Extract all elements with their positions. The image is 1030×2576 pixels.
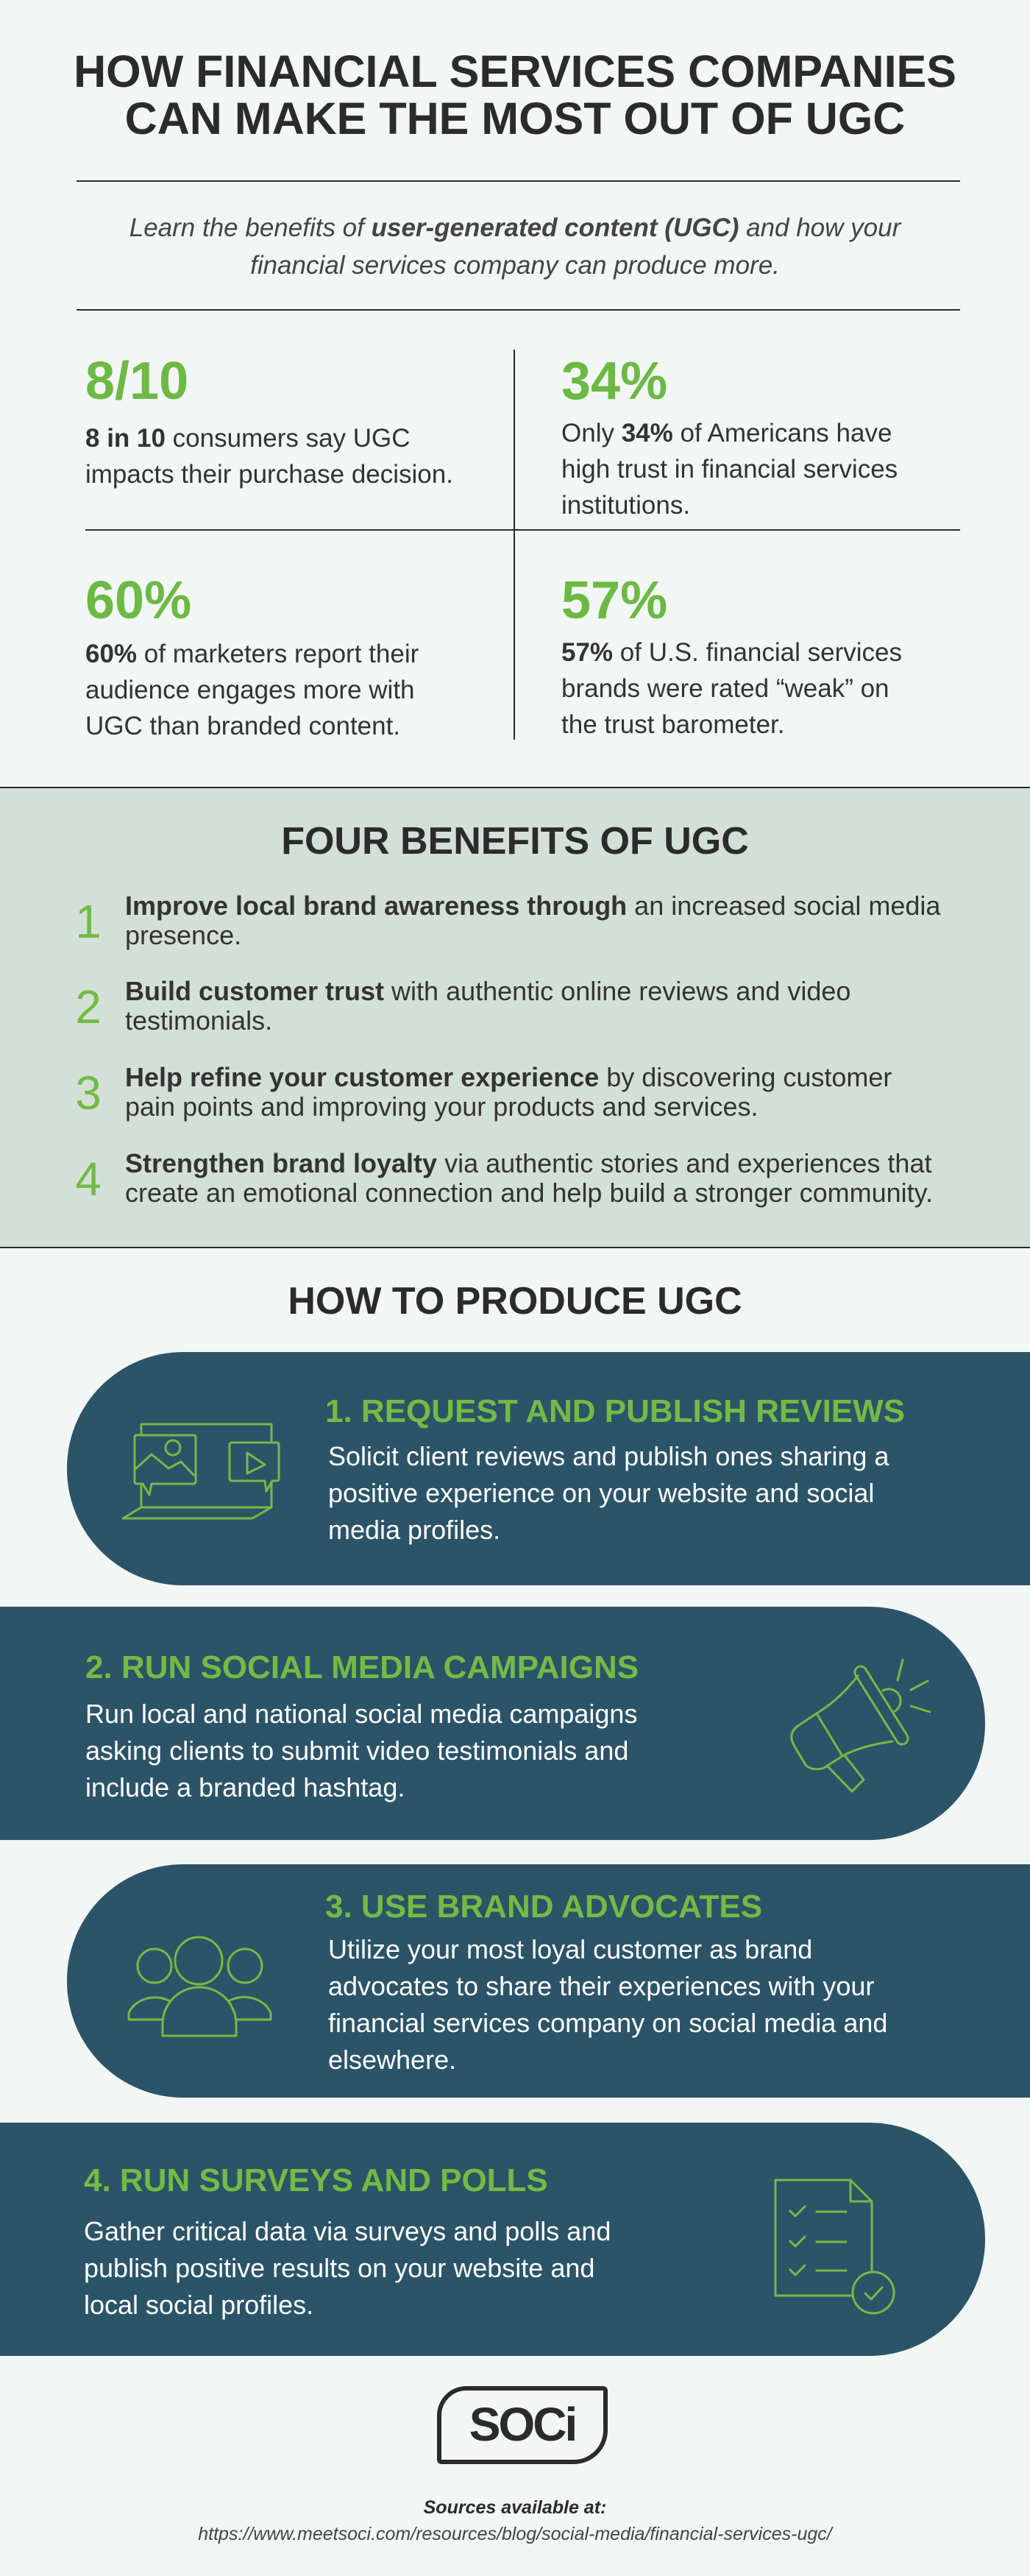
benefit 2 [75,976,850,1036]
text: campaigns: include a branded hashtag. [85,1772,405,1802]
benefit 4: Strengthen brand loyalty via authentic stories and experiences that [125,1148,931,1178]
benefit 1: Improve local brand awareness through an increased social media [125,891,940,921]
benefit 4 [75,1148,933,1208]
icon: checklist document [774,2179,895,2314]
benefit 3: pain points and improving your products and services. [125,1091,758,1122]
benefit 4: 4 [75,1153,102,1206]
heading: social media campaigns: 2. RUN SOCIAL MEDIA CAMPAIGNS [85,1649,639,1685]
subtitle [129,213,902,280]
title: HOW FINANCIAL SERVICES COMPANIES [74,46,956,96]
stat: 57%: the trust barometer. [561,710,784,739]
logo: SOCi: SOCi [469,2398,575,2451]
stat: 34%: high trust in financial services [561,455,898,484]
card 1: reviews [67,1352,1030,1585]
stat: 60%: audience engages more with [85,676,415,704]
logo: SOCi [437,2386,608,2464]
benefit 3: 3 [75,1066,102,1119]
stat: 57%: brands were rated “weak” on [561,674,889,703]
text: advocates [328,1934,887,2075]
stat: 8/10: impacts their purchase decision. [85,460,453,489]
text: advocates: elsewhere. [328,2045,456,2075]
card 4: surveys [0,2123,985,2356]
benefit 2: Build customer trust with authentic online reviews and video [125,976,850,1006]
benefit 3 [75,1062,892,1122]
benefit 1: 1 [75,895,102,948]
card 3: brand advocates [67,1864,1030,2098]
text: advocates: Utilize your most loyal customer as brand [328,1934,812,1964]
text: surveys: Gather critical data via surveys and polls and [84,2216,611,2246]
sources: Sources available at: [424,2497,606,2518]
benefit 1: presence. [125,920,241,950]
heading: use brand advocates: 3. USE BRAND ADVOCATES [325,1889,762,1925]
benefit 1 [75,891,940,950]
stat: 34% [561,352,898,520]
title: CAN MAKE THE MOST OUT OF UGC [125,93,905,144]
text: advocates: financial services company on social media and [328,2008,887,2038]
stat: 60% [85,571,419,740]
stat: 60%: 60% [85,571,191,630]
sources: https://www.meetsoci.com/resources/blog/social-media/financial-services-ugc/ [198,2524,832,2544]
subtitle: Learn the benefits of user-generated content (UGC) and how your [129,213,901,242]
text: surveys [84,2216,611,2320]
text: campaigns: Run local and national social media campaigns [85,1699,637,1729]
sources [198,2497,834,2544]
stat: 60%: 60% of marketers report their [85,640,419,668]
text: reviews [328,1441,889,1545]
stat: 8/10: 8/10 [85,352,188,411]
stat: 8/10: 8 in 10 consumers say UGC [85,424,411,453]
text: surveys: publish positive results on your website and [84,2253,594,2283]
benefit 3: Help refine your customer experience by discovering customer [125,1062,892,1092]
title [74,46,956,144]
text: surveys: local social profiles. [84,2290,313,2320]
panel: four benefits [0,787,1030,1248]
stat: 34%: 34% [561,352,667,411]
benefit 2: testimonials. [125,1005,272,1036]
icon: megaphone [790,1659,931,1793]
heading: four benefits: FOUR BENEFITS OF UGC [281,820,749,863]
text: campaigns: asking clients to submit video testimonials and [85,1735,628,1766]
stat: 8/10 [85,352,453,489]
text: reviews: positive experience on your website and social [328,1478,874,1508]
benefit 2: 2 [75,980,102,1033]
heading: surveys and polls: 4. RUN SURVEYS AND POLLS [84,2162,548,2198]
heading: how to produce ugc: HOW TO PRODUCE UGC [288,1280,742,1323]
heading: request and publish reviews: 1. REQUEST AND PUBLISH REVIEWS [325,1393,905,1429]
text: campaigns [85,1699,637,1802]
text: advocates: advocates to share their experiences with your [328,1971,874,2001]
icon: laptop with media [122,1423,280,1519]
stat: 34%: institutions. [561,491,690,520]
text: reviews: Solicit client reviews and publish ones sharing a [328,1441,889,1471]
stat: 57%: 57% of U.S. financial services [561,638,902,667]
stat: 60%: UGC than branded content. [85,712,400,740]
benefit 4: create an emotional connection and help build a stronger community. [125,1178,933,1208]
stat: 34%: Only 34% of Americans have [561,419,892,447]
card 2: social campaigns [0,1607,985,1840]
icon: people [128,1936,272,2037]
subtitle: financial services company can produce more. [250,251,780,280]
stat: 57% [561,571,902,739]
text: reviews: media profiles. [328,1515,500,1545]
stats grid [85,350,960,740]
stat: 57%: 57% [561,571,667,630]
